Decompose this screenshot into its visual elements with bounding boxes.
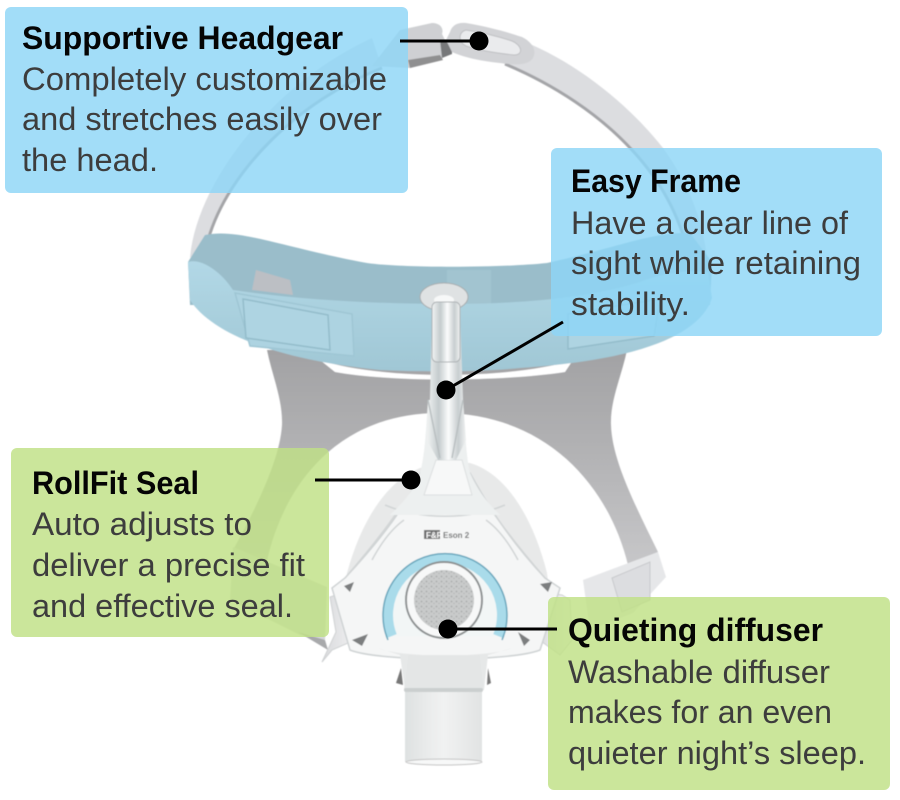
logo: F&P Eson 2 (424, 530, 470, 540)
nose piece and stem (390, 283, 500, 515)
leader: headgear (400, 32, 488, 50)
callout: Quieting diffuser (548, 597, 890, 790)
body text (571, 205, 861, 322)
callout: Supportive Headgear (5, 7, 408, 193)
blue ring (388, 558, 502, 636)
callout panel (5, 7, 408, 193)
diffuser housing (406, 562, 482, 638)
grey tab (252, 270, 293, 295)
body text: makes for an even (568, 694, 832, 730)
clear frame (332, 473, 560, 659)
heading: Quieting diffuser (568, 612, 823, 648)
body text: Washable diffuser (568, 654, 830, 690)
blue band back (188, 233, 712, 305)
lower strap left (230, 547, 328, 650)
elbow connector (378, 648, 512, 765)
callout panel (11, 448, 329, 637)
body text: Auto adjusts to (32, 506, 252, 542)
ring edge (383, 554, 507, 640)
body text: Completely customizable (22, 61, 387, 97)
body text: stability. (571, 286, 690, 322)
body text (568, 654, 866, 771)
logo: F&P Eson 2: F&P (426, 531, 443, 540)
white lens under band (320, 360, 573, 380)
mask seal (345, 462, 549, 655)
diffuser (414, 570, 474, 630)
body text (32, 506, 305, 624)
lower strap right (583, 552, 666, 630)
body text: and effective seal. (32, 588, 293, 624)
top strap left (190, 38, 382, 258)
illustration: nasal mask and headgear (188, 23, 712, 765)
callout: RollFit Seal (11, 448, 329, 637)
body text: sight while retaining (571, 245, 861, 281)
leader: frame (436, 322, 563, 400)
heading: Supportive Headgear (22, 20, 343, 56)
side clips (322, 590, 572, 662)
top strap right (500, 38, 708, 268)
grey lower panel (233, 350, 658, 572)
body text (22, 61, 387, 178)
heading: RollFit Seal (32, 465, 199, 501)
leader: diffuser (438, 620, 557, 638)
buckle (372, 23, 534, 68)
center tab (447, 270, 491, 304)
body text: the head. (22, 142, 158, 178)
callout panel (551, 148, 882, 336)
callout panel (548, 597, 890, 790)
body text: and stretches easily over (22, 101, 382, 137)
body text: deliver a precise fit (32, 547, 305, 583)
blue band front (188, 261, 712, 371)
body text: Have a clear line of (571, 205, 848, 241)
callout: Easy Frame (551, 148, 882, 336)
leader: seal (315, 470, 420, 490)
logo: F&P Eson 2: Eson 2 (443, 531, 470, 540)
heading: Easy Frame (571, 163, 741, 199)
body text: quieter night’s sleep. (568, 735, 866, 771)
